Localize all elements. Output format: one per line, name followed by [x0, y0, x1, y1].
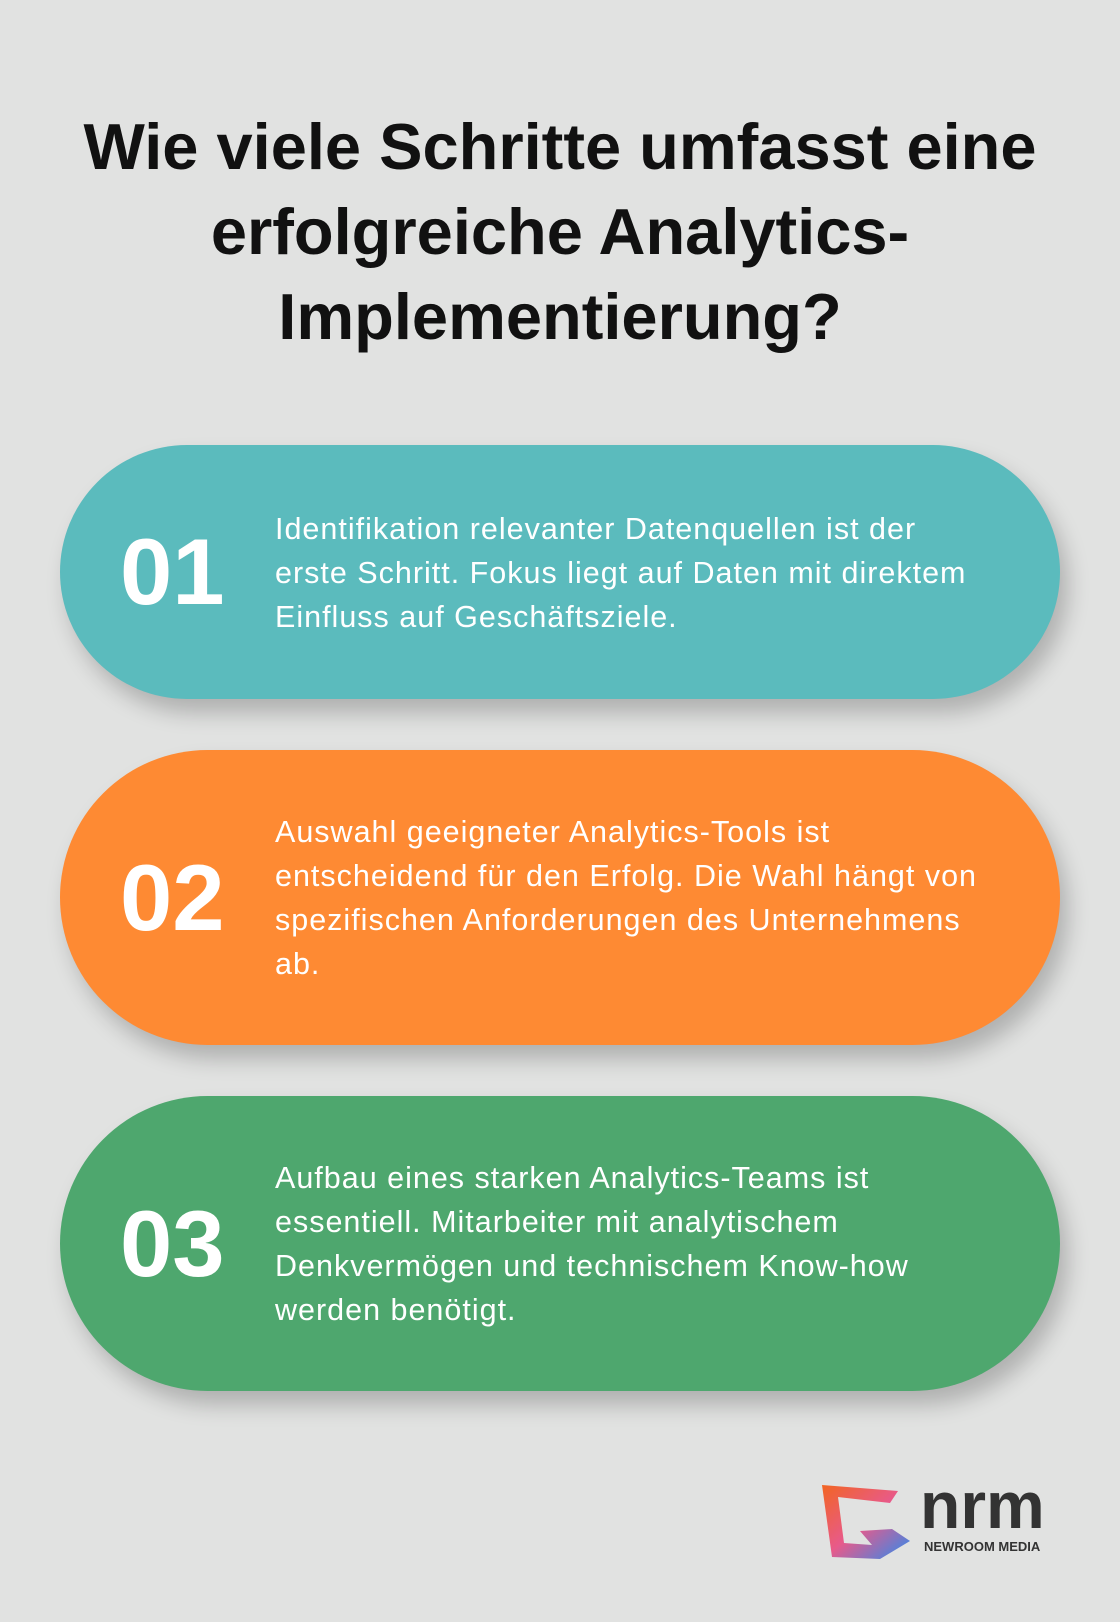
- text 03: [275, 1161, 909, 1327]
- panel: step 02: [60, 750, 1060, 1045]
- title: Wie viele Schritte umfasst eine: [83, 110, 1037, 183]
- panel: step 03: [60, 1096, 1060, 1391]
- text 01: Einfluss auf Geschäftsziele.: [275, 600, 678, 634]
- text 01: erste Schritt. Fokus liegt auf Daten mit direktem: [275, 556, 966, 590]
- title: erfolgreiche Analytics-: [211, 195, 909, 268]
- text 03: werden benötigt.: [275, 1293, 517, 1327]
- text 01: Identifikation relevanter Datenquellen ist der: [275, 512, 916, 546]
- logo: [822, 1468, 1045, 1559]
- text 03: Aufbau eines starken Analytics-Teams ist: [275, 1161, 869, 1195]
- panel: step 01: [60, 445, 1060, 699]
- title: [83, 110, 1037, 353]
- text 01: [275, 512, 966, 634]
- logo text: nrm: [920, 1468, 1045, 1542]
- text 03: Denkvermögen und technischem Know-how: [275, 1249, 909, 1283]
- text 02: entscheidend für den Erfolg. Die Wahl hängt von: [275, 859, 977, 893]
- text 02: spezifischen Anforderungen des Unternehmens: [275, 903, 961, 937]
- text 02: Auswahl geeigneter Analytics-Tools ist: [275, 815, 830, 849]
- text 03: essentiell. Mitarbeiter mit analytischem: [275, 1205, 839, 1239]
- number 01: 01: [120, 519, 225, 624]
- text 02: [275, 815, 977, 981]
- number 02: 02: [120, 845, 225, 950]
- text 02: ab.: [275, 947, 320, 981]
- title: Implementierung?: [278, 280, 842, 353]
- number 03: 03: [120, 1191, 225, 1296]
- logo: NEWROOM MEDIA: [924, 1539, 1040, 1554]
- icon: logo mark: [822, 1485, 910, 1559]
